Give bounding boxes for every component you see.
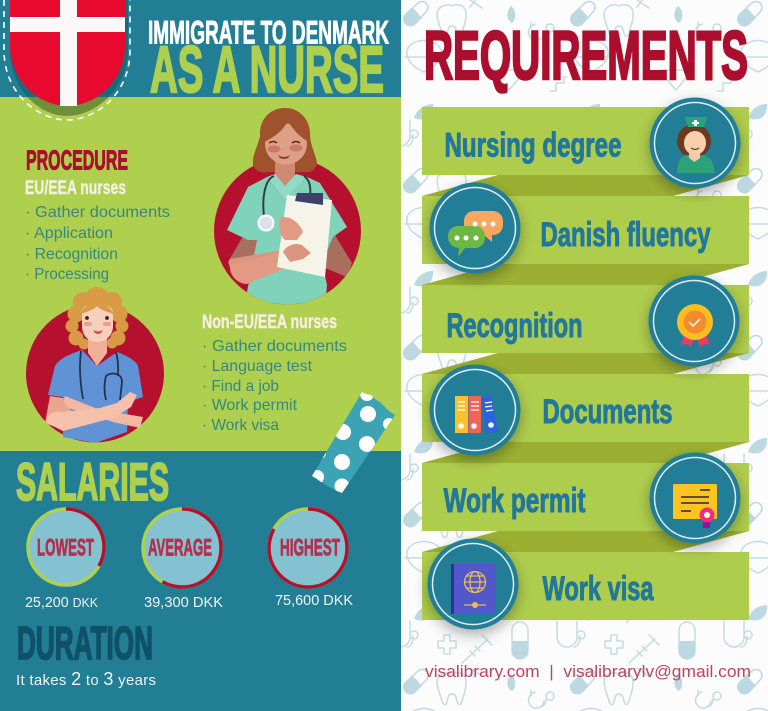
chart: highest salary ring: HIGHEST — [280, 534, 340, 562]
value: average salary: 39,300 DKK — [144, 594, 223, 611]
heading: procedure: PROCEDURE — [26, 144, 128, 176]
panel: procedure — [0, 97, 401, 451]
value: highest salary: 75,600 DKK — [275, 592, 353, 609]
page background pattern — [401, 0, 768, 711]
icon: speech bubbles — [430, 182, 520, 274]
text block: non-EU/EEA steps: · Find a job — [202, 378, 279, 395]
text block: non-EU/EEA steps: · Gather documents — [202, 338, 347, 355]
chart: average salary ring — [143, 509, 221, 587]
label: nursing degree: Nursing degree — [444, 126, 622, 164]
text block: non-EU/EEA steps: · Work permit — [202, 397, 298, 414]
illustration: nurse with crossed arms — [26, 287, 164, 443]
icon: nurse badge — [650, 98, 740, 188]
label: recognition: Recognition — [446, 307, 582, 345]
heading: non-EU/EEA nurses: Non-EU/EEA nurses — [202, 312, 337, 333]
value: lowest salary: 25,200 DKK — [25, 594, 98, 611]
chart: highest salary ring — [269, 509, 347, 587]
text block: non-EU/EEA steps: · Work visa — [202, 417, 279, 434]
panel: header band — [0, 0, 401, 97]
chart: lowest salary ring: LOWEST — [37, 534, 94, 562]
text block: non-EU/EEA steps — [202, 338, 347, 434]
heading: EU/EEA nurses: EU/EEA nurses — [25, 178, 126, 199]
icon: medal — [648, 276, 740, 366]
panel: salaries and duration — [0, 451, 401, 711]
text block: EU/EEA steps: · Gather documents — [25, 204, 170, 221]
icon: passport — [428, 538, 518, 630]
illustration: nurse with clipboard — [214, 108, 361, 310]
title: AS A NURSE — [150, 32, 384, 106]
chart: lowest salary ring — [28, 509, 104, 585]
title — [148, 14, 389, 106]
icon: binders — [430, 364, 520, 456]
heading: salaries: SALARIES — [16, 453, 169, 512]
text block: EU/EEA steps: · Processing — [25, 266, 109, 283]
label: work visa: Work visa — [542, 570, 654, 608]
heading: duration: DURATION — [17, 617, 153, 669]
label: documents: Documents — [542, 393, 672, 431]
chart: average salary ring: AVERAGE — [148, 534, 212, 562]
text: duration detail: It takes 2 to 3 years — [16, 669, 156, 689]
icon: certificate — [650, 452, 740, 544]
footer contact line: visalibrary.com | visalibrarylv@gmail.com — [425, 663, 751, 681]
text block: non-EU/EEA steps: · Language test — [202, 358, 313, 375]
panel: requirement ribbon — [422, 107, 749, 620]
decoration: polka dot tape — [312, 392, 395, 493]
icon: Danish flag shield — [4, 0, 130, 120]
title: IMMIGRATE TO DENMARK — [148, 14, 389, 50]
text block: EU/EEA steps — [25, 204, 170, 283]
label: work permit: Work permit — [444, 482, 586, 520]
text block: EU/EEA steps: · Application — [25, 225, 113, 242]
text block: EU/EEA steps: · Recognition — [25, 246, 118, 263]
